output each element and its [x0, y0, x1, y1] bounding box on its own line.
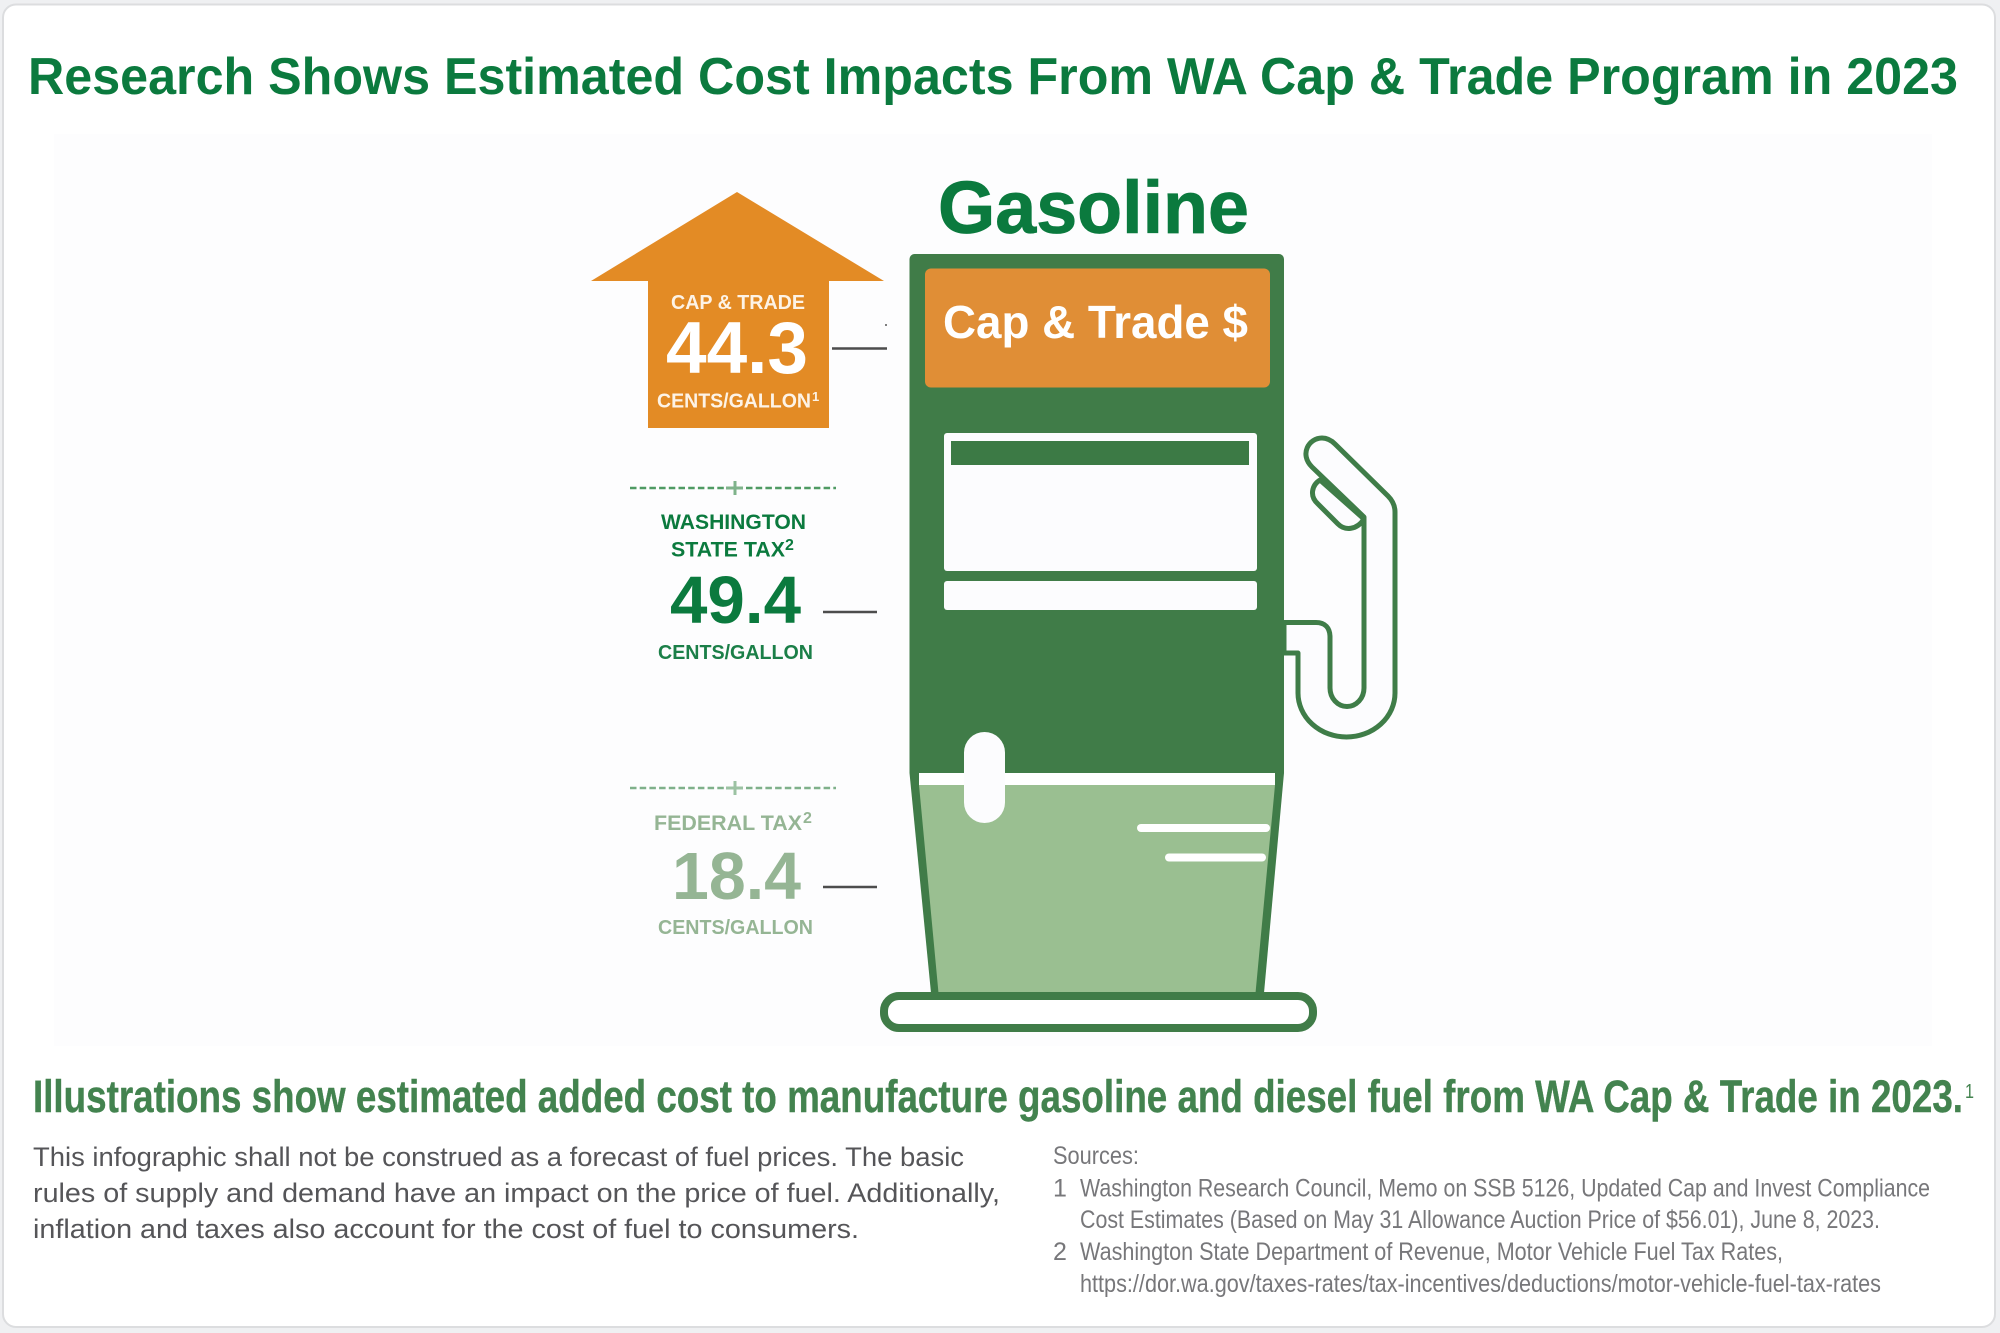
- sources text block: 2: [1053, 1238, 1067, 1266]
- label: state tax: STATE TAX: [671, 538, 785, 562]
- label: Washington: WASHINGTON: [661, 511, 806, 534]
- icon: gas pump: [884, 254, 1395, 1028]
- connector line: cap and trade: [832, 324, 887, 348]
- disclaimer text block: This infographic shall not be construed as a forecast of fuel prices. The basic: [33, 1142, 964, 1172]
- number: 44.3: 44.3: [666, 308, 808, 389]
- footnote marker 1: 1: [1965, 1081, 1974, 1103]
- sources text block: Cost Estimates (Based on May 31 Allowance Auction Price of $56.01), June 8, 2023.: [1080, 1206, 1880, 1234]
- sources text block: [1053, 1142, 1930, 1298]
- callout: cap and trade arrow: [591, 192, 884, 428]
- pump display screen: [944, 433, 1257, 571]
- unit: cents per gallon: CENTS/GALLON: [657, 390, 811, 412]
- number: 18.4: 18.4: [672, 839, 801, 914]
- sources text block: 1: [1053, 1174, 1067, 1202]
- nozzle trigger: [1312, 480, 1364, 528]
- white band above fuel: [919, 773, 1275, 785]
- pump base: [884, 996, 1313, 1028]
- label: federal tax: FEDERAL TAX: [654, 812, 802, 835]
- callout: Washington state tax: [658, 511, 813, 664]
- pump body: [910, 254, 1284, 993]
- unit: cents per gallon: CENTS/GALLON: [658, 917, 813, 939]
- fuel highlight lines: [1137, 824, 1270, 862]
- footnote marker 1: 1: [812, 389, 819, 404]
- pump display slot: [944, 581, 1257, 610]
- divider: plus sign between state tax and federal tax: [630, 781, 836, 795]
- panel text: Cap & Trade $: [943, 296, 1248, 348]
- sources text block: https://dor.wa.gov/taxes-rates/tax-incentives/deductions/motor-vehicle-fuel-tax-rates: [1080, 1270, 1881, 1298]
- connector line: federal tax: [823, 886, 877, 888]
- divider: plus sign between cap and trade and state tax: [630, 481, 836, 495]
- footnote marker 2: 2: [803, 810, 812, 827]
- sources text block: Sources:: [1053, 1142, 1139, 1170]
- sources text block: Washington State Department of Revenue, Motor Vehicle Fuel Tax Rates,: [1080, 1238, 1783, 1266]
- disclaimer text block: rules of supply and demand have an impact on the price of fuel. Additionally,: [33, 1178, 1000, 1208]
- fuel gauge pill: [964, 732, 1005, 823]
- title: Research Shows Estimated Cost Impacts From WA Cap & Trade Program in 2023: [28, 47, 1958, 105]
- disclaimer text block: [33, 1142, 1000, 1244]
- fuel hose and nozzle: [1284, 438, 1395, 737]
- unit: cents per gallon: CENTS/GALLON: [658, 642, 813, 664]
- pump lower window: fuel level: [919, 785, 1275, 993]
- number: 49.4: 49.4: [670, 563, 801, 638]
- icon: orange up arrow: [591, 192, 884, 428]
- cap and trade price panel: [925, 268, 1270, 388]
- disclaimer text block: inflation and taxes also account for the cost of fuel to consumers.: [33, 1214, 859, 1244]
- connector line: state tax: [823, 611, 877, 613]
- hose outline: [1284, 438, 1395, 737]
- footnote marker 2: 2: [785, 537, 794, 554]
- heading: Gasoline: Gasoline: [938, 166, 1249, 249]
- panel: illustration background: [54, 134, 1932, 1046]
- callout: federal tax: [654, 810, 813, 939]
- label: cap and trade: CAP & TRADE: [671, 292, 805, 314]
